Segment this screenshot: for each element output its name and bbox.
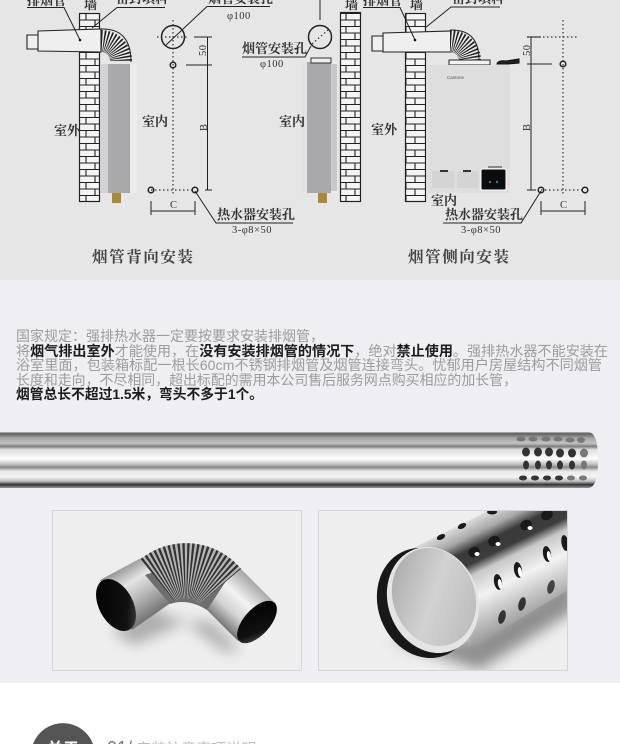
regulation text block: 长度和走向，不尽相同，超出标配的需用本公司售后服务网点购买相应的加长管， — [16, 372, 517, 388]
hole layout and dimensions: C — [560, 200, 568, 211]
pipe body — [405, 510, 568, 646]
diagram: side flue middle heater — [241, 0, 360, 203]
hole layout and dimensions: 50 — [198, 44, 209, 56]
regulation text block: 国家规定：强排热水器一定要按要求安装排烟管， — [16, 328, 324, 344]
pipe shadow — [394, 590, 567, 670]
water heater front: Cantone — [447, 75, 465, 80]
long stainless steel flue pipe — [0, 432, 598, 488]
diagram: side flue installation — [363, 0, 588, 236]
labels: 室外 — [54, 123, 81, 138]
power plug — [497, 59, 519, 64]
flue pipe — [372, 31, 452, 52]
perforations — [516, 436, 588, 480]
hole layout and dimensions: 3-φ8×50 — [232, 225, 272, 236]
regulation text block: 浴室里面，包装箱标配一根长60cm不锈钢排烟管及烟管连接弯头。忧郁用户房屋结构不同烟管 — [16, 357, 602, 373]
panel: perforated pipe end photo — [318, 508, 575, 672]
bellows elbow — [449, 30, 490, 65]
labels — [363, 0, 541, 236]
labels: 3-φ8×50 — [461, 225, 501, 236]
hole layout and dimensions: B — [522, 123, 533, 131]
regulation text block: 烟管总长不超过1.5米，弯头不多于1个。 — [16, 386, 263, 402]
regulation text block — [16, 328, 608, 402]
bellows underlay — [145, 568, 228, 610]
labels: φ100 — [227, 11, 251, 22]
perforations — [436, 508, 570, 625]
labels: 室外 — [371, 122, 398, 137]
title: side installation: 烟管侧向安装 — [407, 247, 511, 266]
right tube — [205, 567, 276, 641]
bellows — [158, 571, 220, 586]
diagram: rear flue installation — [27, 0, 295, 236]
flue pipe — [27, 29, 101, 52]
diagram: side flue middle heater: 烟管安装孔 — [241, 41, 307, 56]
wall — [340, 12, 360, 202]
regulation text block: 将烟气排出室外才能使用，在没有安装排烟管的情况下，绝对禁止使用。强排热水器不能安装在 — [16, 343, 608, 359]
diagram: side flue middle heater: 室内 — [279, 114, 305, 129]
diagram: side flue middle heater: φ100 — [260, 59, 284, 70]
hole layout and dimensions: C — [170, 200, 178, 211]
end cap — [376, 548, 457, 658]
hole layout and dimensions: 50 — [522, 44, 533, 56]
tube openings — [88, 572, 144, 638]
hole layout and dimensions — [522, 20, 588, 215]
next section badge (cropped by page edge) — [33, 723, 93, 744]
labels: 室内 — [142, 114, 168, 129]
wall — [406, 14, 426, 202]
bellows elbow — [101, 29, 131, 62]
labels: 室内 — [431, 193, 457, 208]
panel: elbow photo — [52, 510, 302, 670]
water heater front — [428, 65, 510, 193]
hole layout and dimensions: 热水器安装孔 — [217, 207, 295, 222]
hole layout and dimensions — [148, 20, 295, 236]
water heater side view — [101, 64, 137, 203]
hole layout and dimensions: B — [199, 123, 210, 131]
title: rear installation: 烟管背向安装 — [91, 247, 195, 266]
left tube — [100, 557, 172, 630]
elbow shadow — [112, 606, 240, 652]
labels: 热水器安装孔 — [445, 207, 523, 222]
labels — [27, 0, 273, 138]
wall — [80, 14, 100, 202]
